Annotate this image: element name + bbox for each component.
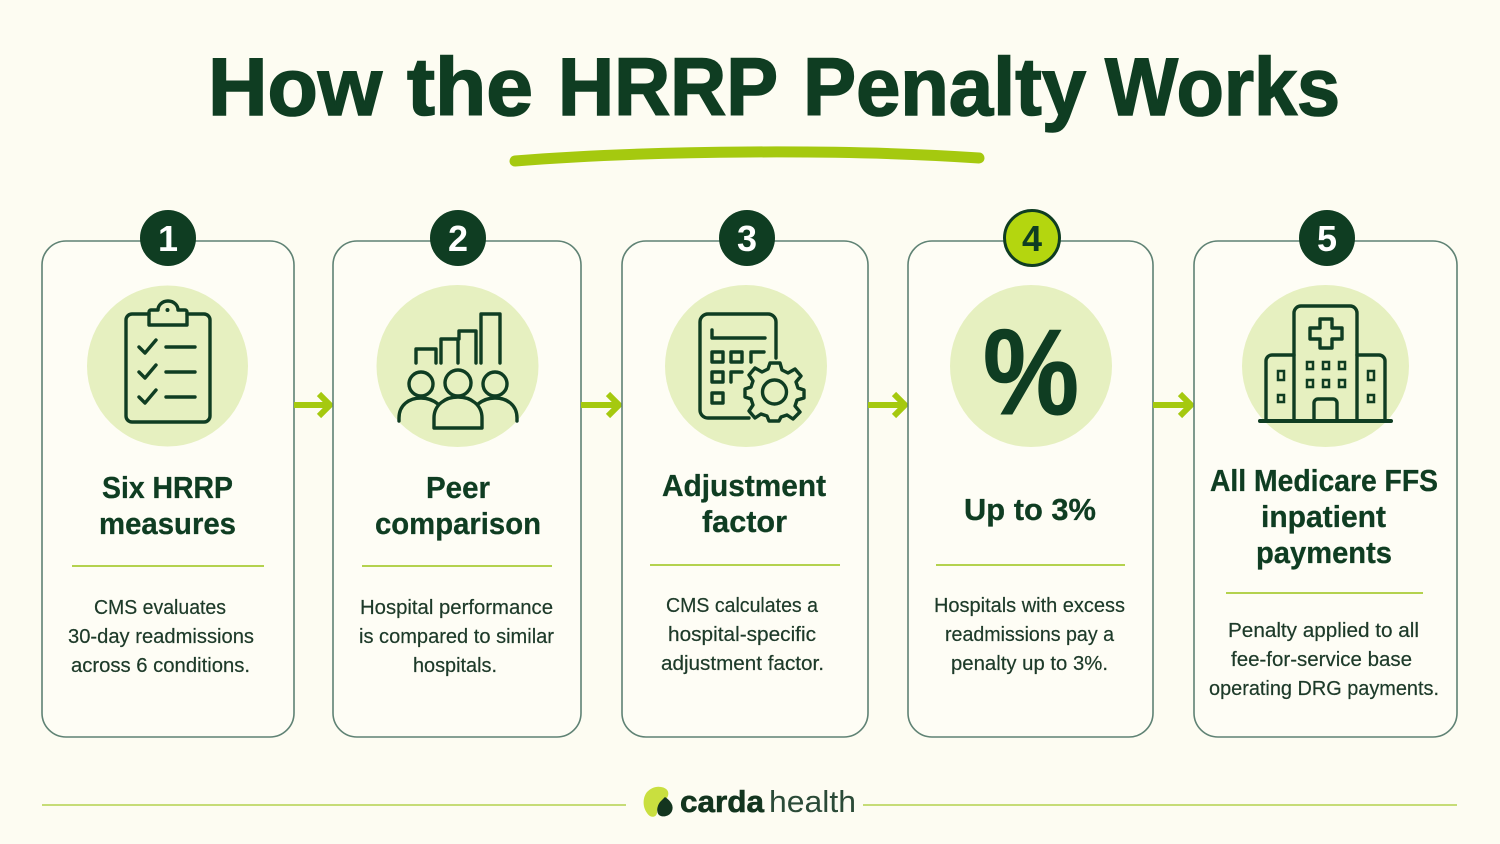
- step 3 number badge: 3: [737, 218, 757, 259]
- step 3 description: CMS calculates a: [666, 595, 819, 617]
- step 4 heading: Up to 3%: [964, 492, 1096, 527]
- title: Works: [1105, 42, 1340, 133]
- step 4 number badge: [1004, 210, 1060, 266]
- panel: step 2: [333, 210, 581, 737]
- logo wordmark: health: [769, 784, 856, 819]
- step 2 description: hospitals.: [413, 655, 497, 677]
- step 3 description: hospital-specific: [668, 624, 816, 646]
- step 1 number badge: [140, 210, 196, 266]
- panel: step 1: [42, 210, 294, 737]
- logo mark: [644, 787, 673, 817]
- icon: peer group with bars: [376, 285, 538, 447]
- step 3 description: adjustment factor.: [661, 653, 824, 675]
- step 4 description: Hospitals with excess: [934, 595, 1125, 617]
- step 1 description: 30-day readmissions: [68, 626, 254, 648]
- step 1 heading: [99, 470, 236, 541]
- title: [208, 42, 1340, 133]
- arrow: step 1 to 2: [294, 394, 330, 416]
- step 2 heading: comparison: [375, 506, 541, 541]
- step 5 description: operating DRG payments.: [1209, 678, 1439, 700]
- step 3 heading: factor: [702, 504, 787, 539]
- step 3 heading: [662, 468, 826, 539]
- step 2 description: Hospital performance: [360, 597, 553, 619]
- step 2 heading: [375, 470, 541, 541]
- icon: clipboard checklist: [87, 286, 248, 446]
- step 2 description: is compared to similar: [359, 626, 554, 648]
- logo wordmark: carda: [680, 784, 765, 819]
- icon: percent sign: %: [983, 304, 1079, 440]
- step 5 description: fee-for-service base: [1231, 649, 1412, 671]
- arrow: step 2 to 3: [581, 394, 619, 416]
- step 3 heading: Adjustment: [662, 468, 826, 503]
- title underline: [515, 152, 979, 161]
- step 4 description: penalty up to 3%.: [951, 653, 1108, 675]
- step 4 description: [934, 595, 1125, 675]
- logo wordmark: [680, 784, 856, 819]
- title: How: [208, 42, 382, 133]
- step 4 description: readmissions pay a: [945, 624, 1115, 646]
- title: HRRP: [558, 42, 778, 133]
- step 1 description: [68, 597, 254, 677]
- step 1 heading: Six HRRP: [102, 470, 233, 505]
- step 2 heading: Peer: [426, 470, 490, 505]
- panel: step 4: [908, 210, 1153, 737]
- step 1 heading: measures: [99, 506, 236, 541]
- step 5 heading: All Medicare FFS: [1210, 463, 1438, 498]
- step 5 heading: inpatient: [1261, 499, 1386, 534]
- step 2 number badge: [430, 210, 486, 266]
- step 1 description: across 6 conditions.: [71, 655, 250, 677]
- step 5 heading: payments: [1256, 535, 1392, 570]
- icon: percent sign: [950, 285, 1112, 447]
- title: the: [407, 42, 533, 133]
- step 1 description: CMS evaluates: [94, 597, 226, 619]
- step 2 description: [359, 597, 554, 677]
- step 3 number badge: [719, 210, 775, 266]
- icon: hospital building: [1242, 285, 1409, 447]
- step 5 description: [1209, 620, 1439, 700]
- step 2 number badge: 2: [448, 218, 468, 259]
- title: Penalty: [803, 42, 1086, 133]
- arrow: step 3 to 4: [868, 394, 905, 416]
- step 5 description: Penalty applied to all: [1228, 620, 1419, 642]
- panel: step 3: [622, 210, 868, 737]
- logo: carda health: [644, 784, 856, 819]
- step 5 number badge: 5: [1317, 218, 1337, 259]
- arrow: step 4 to 5: [1153, 394, 1191, 416]
- step 4 number badge: 4: [1022, 218, 1042, 259]
- icon: calculator with gear: [665, 285, 827, 447]
- step 3 description: [661, 595, 824, 675]
- panel: step 5: [1194, 210, 1457, 737]
- step 5 heading: [1210, 463, 1438, 570]
- step 1 number badge: 1: [158, 218, 178, 259]
- step 5 number badge: [1299, 210, 1355, 266]
